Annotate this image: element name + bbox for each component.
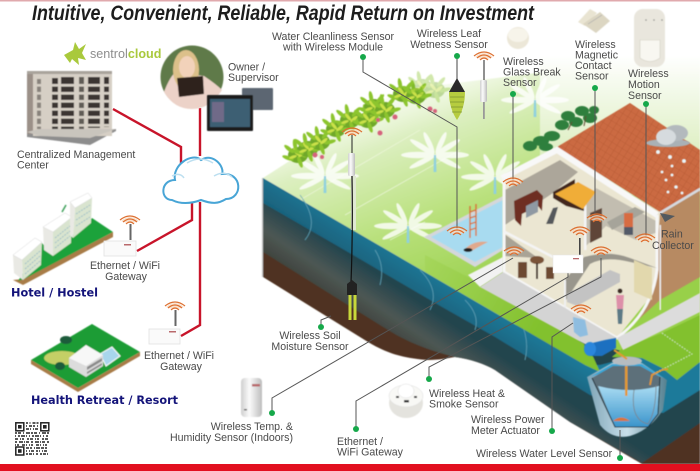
panel: tan right wall bbox=[618, 190, 700, 338]
label: power meter actuator: Wireless Power bbox=[471, 414, 545, 426]
hedge plants bbox=[282, 71, 451, 168]
label: magnetic contact sensor: Magnetic bbox=[575, 50, 619, 62]
panel: walkway bbox=[480, 272, 617, 352]
trees behind house bbox=[523, 106, 599, 151]
label: hotel / hostel: Hotel / Hostel bbox=[11, 286, 98, 300]
label: centralized management center: Centralized Management bbox=[17, 149, 135, 161]
label: owner / supervisor: Owner / bbox=[228, 62, 265, 74]
label: rain collector: Rain bbox=[661, 228, 683, 240]
logo: sentrolcloud: sentrolcloud bbox=[90, 47, 161, 61]
label: heat and smoke sensor: Smoke Sensor bbox=[429, 398, 499, 410]
lid bbox=[612, 356, 642, 366]
label: magnetic contact sensor: Wireless bbox=[575, 39, 616, 51]
water cleanliness / soil probe bbox=[342, 128, 362, 320]
label: water cleanliness sensor: Water Cleanliness Sensor bbox=[272, 31, 394, 43]
photo: owner with tablet bbox=[160, 46, 224, 109]
water tank bbox=[587, 350, 668, 437]
soil layer: brown subsoil bbox=[263, 250, 700, 464]
water bbox=[598, 386, 659, 427]
white wall edges bbox=[502, 150, 657, 215]
callout dots bbox=[269, 53, 649, 461]
office desk and person bbox=[607, 207, 645, 230]
panel: office wall bbox=[586, 188, 658, 246]
top rule bbox=[0, 0, 700, 2]
label: health retreat / resort: Health Retreat / Resort bbox=[31, 393, 179, 407]
soil layer: blue water table bbox=[263, 178, 700, 413]
label: hotel gateway: Ethernet / WiFi bbox=[90, 260, 160, 272]
label: resort gateway: Ethernet / WiFi bbox=[144, 350, 214, 362]
label: hotel gateway: Gateway bbox=[105, 271, 148, 283]
water pump bbox=[584, 338, 616, 356]
label: temp and humidity sensor: Wireless Temp. & bbox=[211, 421, 293, 433]
rain cloud icon bbox=[646, 125, 690, 194]
label: glass break sensor: Sensor bbox=[503, 77, 537, 89]
logo: sentrolcloud bbox=[64, 42, 161, 65]
panel: roof bbox=[557, 103, 700, 212]
callout leader lines bbox=[272, 57, 646, 458]
lawn guide lines bbox=[300, 130, 585, 350]
label: centralized management center: Center bbox=[17, 160, 49, 172]
illustration: health retreat resort bbox=[31, 324, 140, 392]
icon: motion sensor bbox=[634, 9, 665, 67]
label: rain collector: Collector bbox=[652, 240, 694, 252]
panel: interior floor bbox=[503, 150, 660, 338]
label: water level sensor: Wireless Water Level Sensor bbox=[476, 448, 613, 460]
label: heat and smoke sensor: Wireless Heat & bbox=[429, 388, 505, 400]
icon: temp and humidity sensor bbox=[241, 378, 262, 417]
label: water cleanliness sensor: with Wireless Module bbox=[282, 42, 383, 54]
label: ethernet gateway: WiFi Gateway bbox=[337, 446, 404, 458]
chair bbox=[546, 207, 558, 224]
house bbox=[480, 103, 700, 352]
label: soil moisture sensor: Moisture Sensor bbox=[271, 341, 349, 353]
panel: right lawn strip bbox=[612, 315, 700, 380]
cyan rim bbox=[590, 364, 664, 378]
person in kitchen bbox=[616, 288, 624, 324]
label: motion sensor: Motion bbox=[628, 79, 660, 91]
swimming pool bbox=[424, 196, 503, 287]
label: leaf wetness sensor: Wetness Sensor bbox=[410, 39, 488, 51]
panel: curved kitchen wall bbox=[565, 254, 657, 300]
illustration: soil cross-section block bbox=[262, 55, 700, 464]
wifi signal markers in scene bbox=[447, 178, 655, 313]
wireless leaf wetness sensor icon bbox=[449, 56, 465, 120]
block left edge bbox=[262, 178, 264, 277]
desk bbox=[514, 190, 543, 226]
door bbox=[590, 208, 602, 243]
title: Intuitive, Convenient, Reliable, Rapid Return on Investment bbox=[32, 2, 535, 25]
tank outer body bbox=[587, 363, 667, 437]
tank dark interior bbox=[592, 366, 660, 427]
panel: bright front lawn strip bbox=[425, 255, 600, 372]
panel: upper back wall bbox=[505, 160, 578, 225]
sprinklers bbox=[291, 76, 569, 243]
label: magnetic contact sensor: Sensor bbox=[575, 70, 609, 82]
QR code bbox=[15, 423, 49, 455]
panel: lawn surface bbox=[263, 70, 700, 365]
label: power meter actuator: Meter Actuator bbox=[471, 425, 540, 437]
label: ethernet gateway: Ethernet / bbox=[337, 436, 383, 448]
rain collector gutter bbox=[660, 213, 675, 222]
bed bbox=[553, 179, 584, 211]
label: temp and humidity sensor: Humidity Sensor (Indoors) bbox=[170, 432, 293, 444]
icon: hotel gateway bbox=[104, 216, 140, 256]
label: leaf wetness sensor: Wireless Leaf bbox=[417, 28, 481, 40]
panel: dining back wall bbox=[503, 233, 538, 258]
label: motion sensor: Wireless bbox=[628, 68, 669, 80]
bottom red bar bbox=[0, 464, 700, 471]
icon: magnetic contact sensor bbox=[578, 9, 610, 33]
dining set bbox=[530, 256, 544, 264]
soil layer: dark strata left bbox=[263, 200, 700, 463]
label: glass break sensor: Glass Break bbox=[503, 66, 561, 78]
label: owner / supervisor: Supervisor bbox=[228, 72, 279, 84]
icon: cloud bbox=[163, 158, 238, 203]
label: motion sensor: Sensor bbox=[628, 90, 662, 102]
illustration: hotel complex bbox=[13, 193, 113, 285]
indoor gateway bbox=[553, 238, 583, 273]
icon: heat and smoke sensor bbox=[389, 384, 423, 418]
icon: monitors bbox=[207, 88, 273, 131]
label: magnetic contact sensor: Contact bbox=[575, 60, 612, 72]
label: soil moisture sensor: Wireless Soil bbox=[279, 330, 341, 342]
power meter actuator bbox=[573, 317, 588, 337]
panel: right lawn fade bbox=[540, 55, 700, 195]
kitchen counter bbox=[567, 270, 620, 306]
icon: glass break sensor bbox=[507, 27, 529, 49]
network connection lines bbox=[113, 108, 200, 336]
label: resort gateway: Gateway bbox=[160, 361, 203, 373]
label: glass break sensor: Wireless bbox=[503, 56, 544, 68]
wireless node on pole bbox=[474, 52, 494, 119]
icon: resort gateway bbox=[149, 302, 185, 344]
icon: management center building bbox=[27, 71, 116, 145]
